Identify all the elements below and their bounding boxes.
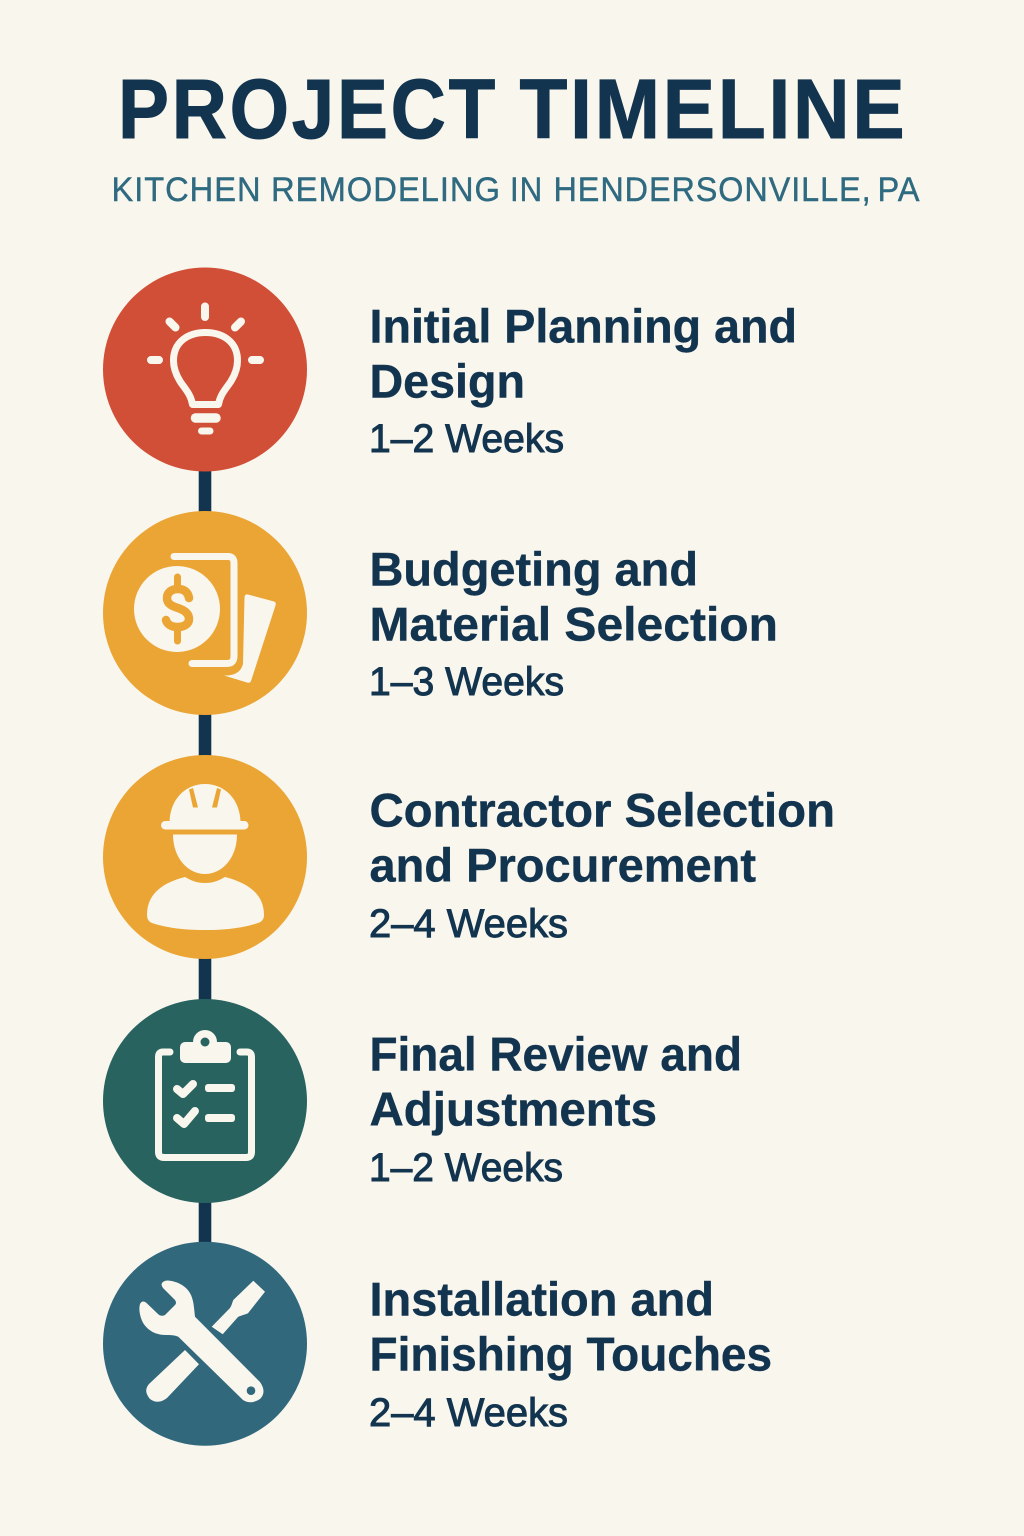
subtitle: [112, 171, 920, 209]
step 5: installation and finishing touches: [103, 1242, 772, 1446]
icon: worker with hard hat: [103, 755, 307, 959]
icon: clipboard checklist: [103, 999, 307, 1203]
title: PROJECT: [118, 62, 498, 156]
step 1 text: 1–2 Weeks: [369, 417, 564, 461]
subtitle: KITCHEN: [112, 171, 262, 209]
step 1 text: Design: [370, 354, 525, 408]
step 3: contractor selection and procurement: [103, 755, 835, 959]
step 1: initial planning and design: [103, 268, 797, 472]
timeline connector line: [199, 460, 211, 1250]
icon: money and cards: [103, 511, 307, 715]
step 4 text: [369, 1028, 742, 1190]
step 5 text: Finishing Touches: [370, 1328, 772, 1380]
title: TIMELINE: [520, 62, 908, 156]
title: [118, 62, 908, 156]
step 3 text: Contractor Selection: [370, 784, 835, 836]
subtitle: HENDERSONVILLE,: [554, 171, 872, 209]
step 3 text: [369, 784, 835, 946]
subtitle: IN: [510, 171, 543, 209]
step 2 text: Material Selection: [370, 598, 778, 650]
icon: light bulb: [103, 268, 307, 472]
step 4: final review and adjustments: [103, 999, 742, 1203]
step 5 text: [369, 1272, 772, 1435]
step 3 text: and Procurement: [370, 838, 756, 892]
step 5 text: Installation and: [370, 1272, 714, 1326]
step 2: budgeting and material selection: [103, 511, 778, 715]
step 1 text: Initial Planning and: [370, 300, 797, 352]
subtitle: REMODELING: [271, 171, 501, 209]
step 4 text: 1–2 Weeks: [369, 1146, 563, 1190]
step 2 text: Budgeting and: [370, 542, 698, 596]
subtitle: PA: [878, 171, 920, 209]
step 4 text: Final Review and: [370, 1028, 742, 1080]
step 2 text: 1–3 Weeks: [369, 660, 564, 704]
step 1 text: [369, 300, 797, 461]
step 4 text: Adjustments: [370, 1082, 657, 1136]
step 5 text: 2–4 Weeks: [369, 1391, 568, 1435]
step 3 text: 2–4 Weeks: [369, 902, 568, 946]
step 2 text: [369, 542, 778, 704]
icon: wrench and screwdriver: [103, 1242, 307, 1446]
